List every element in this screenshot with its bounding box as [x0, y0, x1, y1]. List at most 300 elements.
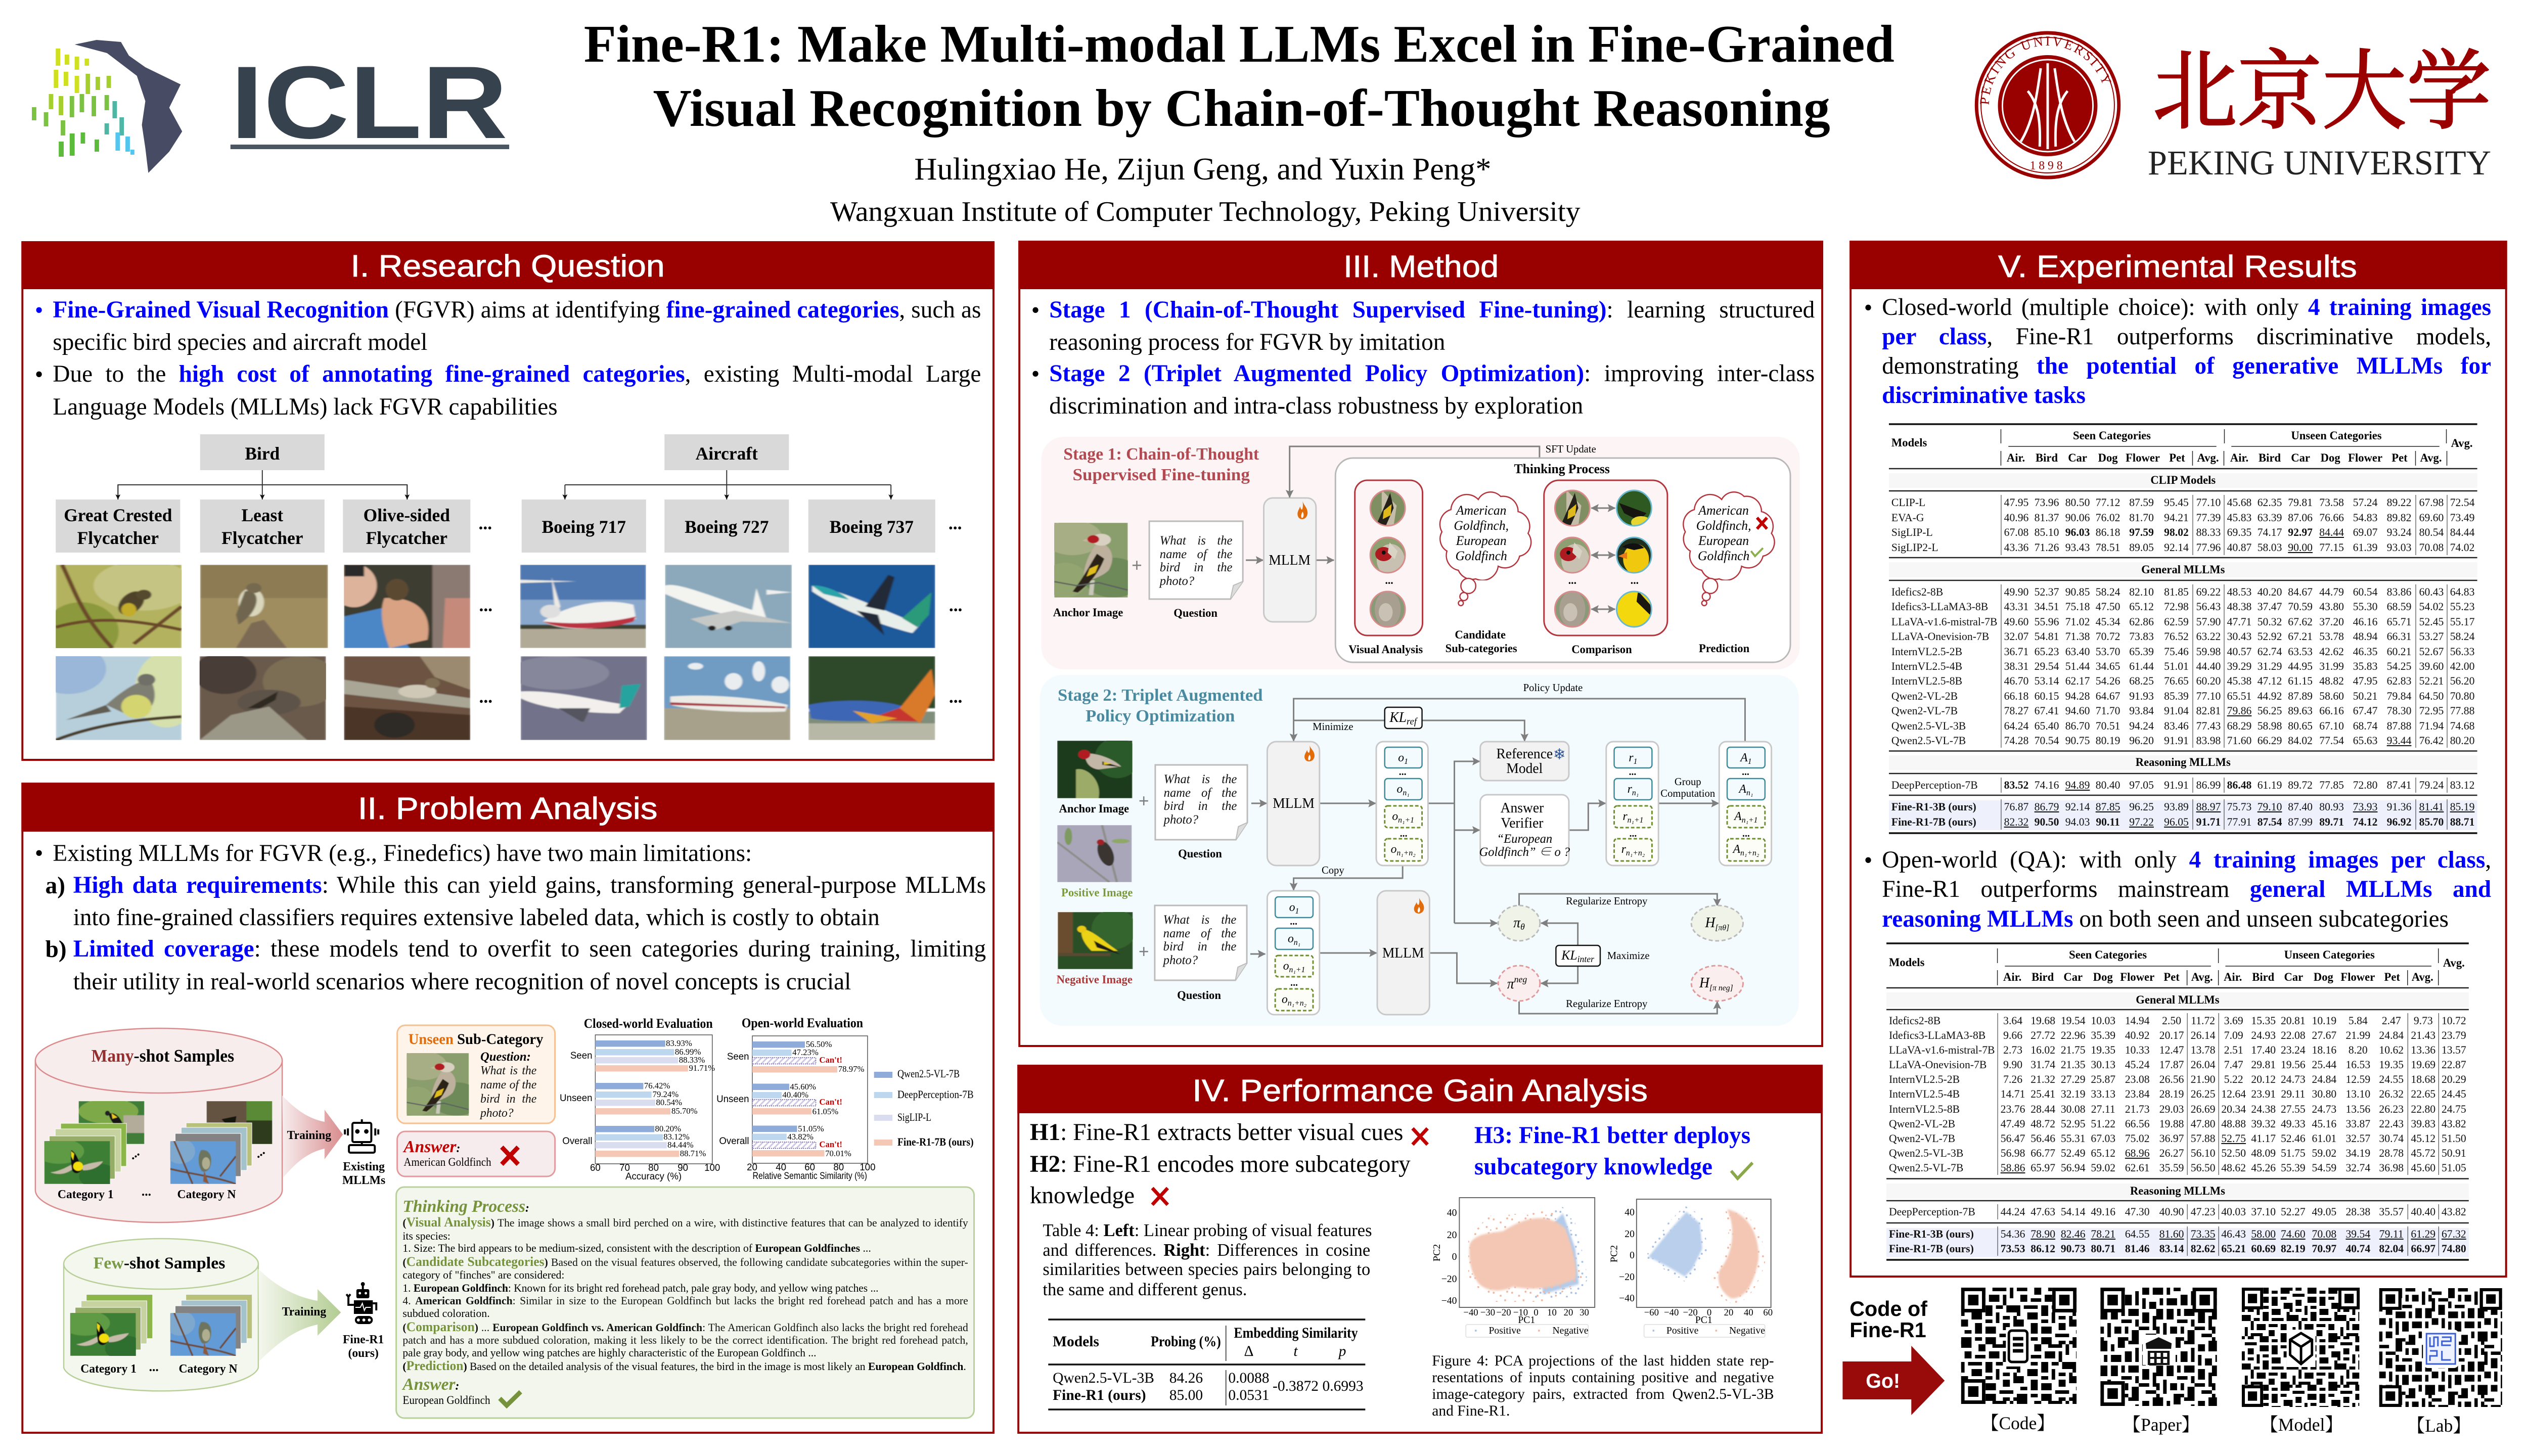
table: open-world QA: 67.32 — [2442, 1227, 2466, 1240]
table: closed-world accuracy: 70.59 — [2288, 600, 2313, 613]
table: open-world QA: Dog — [2093, 971, 2113, 983]
connectors: stage 2 data flow — [1250, 699, 1745, 1014]
table: open-world QA: 56.50 — [2191, 1161, 2216, 1174]
table: closed-world accuracy: 94.24 — [2129, 719, 2154, 732]
scatter chart: PCA Qwen2.5-VL-3B: −30 — [1480, 1307, 1495, 1318]
table: open-world QA: 30.74 — [2379, 1132, 2404, 1145]
text: positive image: Positive Image — [1061, 886, 1133, 899]
text: closed-world result: per class, Fine-R1 outperforms discriminative models, — [1882, 323, 2491, 350]
thought cloud: prediction: European — [1698, 533, 1749, 548]
table: open-world QA: Avg. — [2443, 957, 2465, 969]
table: open-world QA: 59.02 — [2312, 1147, 2336, 1159]
table: open-world QA: 37.10 — [2251, 1205, 2276, 1218]
text: limitations: b) — [46, 936, 67, 963]
table: closed-world accuracy: 43.36 — [2004, 541, 2028, 554]
table: closed-world accuracy: 73.93 — [2353, 800, 2377, 813]
text: category labels: ... — [251, 1143, 267, 1161]
scatter chart: PCA Qwen2.5-VL-3B: −20 — [1441, 1273, 1457, 1285]
table: closed-world accuracy: 65.63 — [2353, 734, 2377, 747]
stack: copied outputs o: n₁ — [1294, 938, 1300, 947]
node: policy pi neg: π — [1507, 976, 1514, 992]
node: policy pi: π — [1513, 915, 1520, 931]
table: closed-world accuracy: 68.29 — [2227, 719, 2251, 732]
table: open-world QA: 78.90 — [2030, 1227, 2055, 1240]
table: closed-world accuracy: 56.33 — [2450, 645, 2474, 658]
table: closed-world accuracy: 82.81 — [2196, 704, 2221, 717]
table: closed-world accuracy: 68.59 — [2387, 600, 2411, 613]
table: open-world QA: 32.57 — [2345, 1132, 2370, 1145]
table: open-world QA: 39.32 — [2251, 1117, 2276, 1130]
panel: III. Method — [1018, 241, 1823, 1046]
table: open-world QA: 19.35 — [2379, 1058, 2404, 1071]
diagram: many-shot database — [34, 1028, 282, 1222]
table: closed-world accuracy: 60.20 — [2196, 674, 2221, 687]
diagram: bird taxonomy labels: Great Crested — [64, 505, 172, 525]
table: closed-world accuracy: 77.10 — [2196, 690, 2221, 702]
table: probing and embedding similarity: 85.00 — [1169, 1387, 1203, 1403]
table: closed-world accuracy: 37.47 — [2258, 600, 2282, 613]
table: open-world QA: 21.35 — [2061, 1058, 2086, 1071]
table: closed-world accuracy: 37.20 — [2319, 615, 2344, 628]
table: closed-world accuracy: Qwen2.5-VL-3B — [1891, 719, 1966, 732]
table: open-world QA: 65.12 — [2091, 1147, 2115, 1159]
scatter chart: PCA Qwen2.5-VL-3B: 40 — [1447, 1207, 1457, 1218]
scatter chart: PCA Fine-R1: 20 — [1624, 1228, 1635, 1240]
text: connector labels: Group — [1675, 776, 1701, 788]
photo: great crested flycatcher 2 — [30, 644, 198, 740]
node: policy pi neg: neg — [1514, 974, 1527, 984]
bar chart: closed-world evaluation: Accuracy (%) — [625, 1171, 682, 1181]
table: open-world QA: 19.69 — [2411, 1058, 2435, 1071]
table: open-world QA: 73.35 — [2191, 1227, 2216, 1240]
table: closed-world accuracy: 45.34 — [2096, 615, 2120, 628]
text: step labels: Visual Analysis — [1348, 643, 1423, 656]
table: closed-world accuracy: 35.83 — [2353, 660, 2377, 672]
bar chart: open-world evaluation: 61.05% — [812, 1107, 838, 1116]
text: QR labels: 【Model】 — [2260, 1415, 2343, 1435]
table: open-world QA: 30.80 — [2312, 1087, 2336, 1100]
table: closed-world accuracy: 66.16 — [2319, 704, 2344, 717]
table: open-world QA: 32.74 — [2345, 1161, 2370, 1174]
text: category labels: ... — [142, 1184, 151, 1199]
table: closed-world accuracy: 62.17 — [2065, 674, 2090, 687]
box: KL ref: ref — [1407, 716, 1418, 727]
table: open-world QA: 35.39 — [2091, 1029, 2115, 1041]
table: closed-world accuracy: 32.07 — [2004, 630, 2028, 643]
table: open-world QA: 66.97 — [2411, 1242, 2435, 1255]
text: plus signs — [1139, 791, 1149, 962]
table: open-world QA: Bird — [2252, 971, 2275, 983]
diagram: bird taxonomy labels: ... — [479, 513, 492, 533]
table: closed-world accuracy: 80.54 — [2419, 526, 2444, 538]
table: open-world QA: 51.22 — [2091, 1117, 2115, 1130]
table: closed-world accuracy: 80.65 — [2288, 719, 2313, 732]
thought cloud: prediction: Goldfinch — [1698, 549, 1749, 563]
title: Fine-R1: Make Multi-modal LLMs Excel in Fine-Grained — [584, 14, 1894, 73]
table: open-world QA: 30.13 — [2091, 1058, 2115, 1071]
table: closed-world accuracy: 36.71 — [2004, 645, 2028, 658]
table: open-world QA: 45.72 — [2411, 1147, 2435, 1159]
box: KL inter: inter — [1577, 954, 1594, 964]
heading: stage 2: Policy Optimization — [1086, 707, 1235, 725]
table: closed-world accuracy: 88.71 — [2450, 815, 2474, 828]
table: closed-world accuracy: 60.54 — [2353, 585, 2377, 598]
table: open-world QA: 47.30 — [2125, 1205, 2150, 1218]
card: question negative: Question — [1177, 989, 1221, 1002]
table: closed-world accuracy: 71.02 — [2065, 615, 2090, 628]
text: research question bullets: specific bird species and aircraft model — [53, 329, 427, 355]
scatter chart: PCA Fine-R1: 40 — [1624, 1207, 1635, 1218]
arrow: few-shot training: Training — [282, 1305, 326, 1318]
callout: thinking process — [396, 1187, 974, 1418]
table: open-world QA: 27.29 — [2061, 1073, 2086, 1085]
table: open-world QA: 25.87 — [2091, 1073, 2115, 1085]
table: open-world QA: 14.94 — [2125, 1014, 2150, 1027]
photo: anchor image — [1043, 520, 1143, 598]
table: closed-world accuracy: 73.96 — [2035, 496, 2059, 509]
heading: section III: III. Method — [1343, 249, 1499, 284]
node: entropy H pi neg: [π neg] — [1709, 984, 1733, 992]
table: probing and embedding similarity: t — [1293, 1343, 1298, 1359]
table: open-world QA: 45.16 — [2312, 1117, 2336, 1130]
bar chart: open-world evaluation: Overall — [719, 1135, 749, 1146]
table: closed-world accuracy: Qwen2-VL-2B — [1891, 690, 1958, 702]
table: open-world QA: 54.36 — [2001, 1227, 2025, 1240]
table: open-world QA: 56.94 — [2061, 1161, 2086, 1174]
table: closed-world accuracy: Avg. — [2197, 451, 2219, 464]
table: open-world QA: 61.01 — [2312, 1132, 2336, 1145]
heading: section III — [1018, 241, 1823, 289]
stack: rewards r: n₁+n₂ — [1626, 849, 1645, 857]
text: connector labels: Computation — [1660, 787, 1716, 799]
table: open-world QA: 10.19 — [2312, 1014, 2336, 1027]
table: closed-world accuracy: 83.46 — [2164, 719, 2189, 732]
table: open-world QA: 20.29 — [2442, 1073, 2466, 1085]
table: closed-world accuracy: 71.70 — [2096, 704, 2120, 717]
table: closed-world accuracy: 66.31 — [2387, 630, 2411, 643]
table: open-world QA: 9.66 — [2003, 1029, 2022, 1041]
callout: thinking process: (Candidate Subcategories) Based on the visual features observed, the following candidate subcategories within the super- — [402, 1254, 968, 1269]
table: closed-world accuracy: 90.06 — [2065, 511, 2090, 524]
table: open-world QA: 49.05 — [2312, 1205, 2336, 1218]
table: closed-world accuracy: Seen Categories — [2073, 429, 2151, 442]
table: closed-world accuracy: 91.04 — [2164, 704, 2189, 717]
card: question: What is the name of the bird in the photo? — [1160, 534, 1232, 587]
table: closed-world accuracy: 93.24 — [2387, 526, 2411, 538]
table: open-world QA: Pet — [2384, 971, 2400, 983]
table: closed-world accuracy: 93.43 — [2065, 541, 2090, 554]
bar chart: open-world evaluation: 78.97% — [838, 1064, 864, 1074]
text: connector labels: Copy — [1322, 864, 1344, 876]
text: hypotheses H1 H2: H2: Fine-R1 encodes more subcategory — [1030, 1151, 1411, 1177]
callout: thinking process: Thinking Process: — [402, 1197, 529, 1216]
stack: copied outputs o: o — [1282, 993, 1288, 1006]
card: question anchor: Question — [1178, 847, 1222, 860]
table: closed-world accuracy: 67.47 — [2353, 704, 2377, 717]
table: open-world QA: 43.82 — [2442, 1205, 2466, 1218]
table: open-world QA: Models — [1889, 956, 1925, 969]
table: closed-world accuracy: Air. — [2007, 451, 2025, 464]
stack: rewards r: ... — [1630, 828, 1637, 839]
table: closed-world accuracy: 60.43 — [2419, 585, 2444, 598]
table: closed-world accuracy: 60.21 — [2387, 645, 2411, 658]
arrow: Go — [1842, 1346, 1945, 1415]
table: closed-world accuracy: 67.98 — [2419, 496, 2444, 509]
text: negative image: Negative Image — [1057, 973, 1133, 986]
text: QR labels: 【Lab】 — [2407, 1416, 2471, 1436]
table: closed-world accuracy: InternVL2.5-4B — [1891, 660, 1962, 672]
table: closed-world accuracy: Reasoning MLLMs — [2136, 756, 2231, 768]
stack: advantages A: n₁+1 — [1742, 816, 1758, 825]
table: open-world QA: 49.33 — [2281, 1117, 2306, 1130]
table: closed-world accuracy: 89.71 — [2319, 815, 2344, 828]
table: closed-world accuracy: Idefics2-8B — [1891, 585, 1943, 598]
photo: olive-sided flycatcher 1 — [331, 564, 470, 648]
bar chart: closed-world evaluation: 84.44% — [667, 1140, 694, 1150]
scatter chart: PCA Qwen2.5-VL-3B — [1431, 1198, 1595, 1337]
callout: thinking process: (Comparison) ... European Goldfinch vs. American Goldfinch: The American Goldfinch also lacks the bright red forehead — [402, 1320, 968, 1334]
table: open-world QA: 22.65 — [2411, 1087, 2435, 1100]
table: closed-world accuracy: 81.85 — [2164, 585, 2189, 598]
table: open-world QA: 61.29 — [2411, 1227, 2435, 1240]
thought cloud: prediction — [1683, 492, 1775, 606]
stack: outputs o: o — [1398, 751, 1404, 764]
stack: outputs o: o — [1397, 783, 1403, 796]
table: open-world QA: 28.19 — [2159, 1087, 2184, 1100]
table: open-world QA: 24.38 — [2251, 1103, 2276, 1115]
text: ellipses after image rows: ... — [949, 687, 962, 707]
diagram: aircraft taxonomy labels: Boeing 737 — [830, 517, 914, 537]
card: question — [1149, 521, 1243, 599]
table: open-world QA: Fine-R1-7B (ours) — [1889, 1242, 1974, 1255]
table: open-world QA: Qwen2-VL-7B — [1889, 1132, 1955, 1145]
scatter chart: PCA Qwen2.5-VL-3B: PC1 — [1518, 1314, 1535, 1326]
text: limitations: their utility in real-world scenarios where recognition of novel concepts is crucial — [73, 969, 851, 995]
bar chart: open-world evaluation: 80 — [833, 1162, 844, 1172]
table: open-world QA: 24.84 — [2379, 1029, 2404, 1041]
footer: code links — [1842, 1284, 2505, 1436]
table: open-world QA: 13.56 — [2345, 1103, 2370, 1115]
text: few category labels: Category N — [178, 1362, 238, 1376]
image stack: category 1 — [34, 1099, 144, 1189]
table: closed-world accuracy: 61.15 — [2288, 674, 2313, 687]
diagram: bird taxonomy labels: Flycatcher — [366, 528, 447, 548]
box: KL inter — [1556, 945, 1600, 966]
table: closed-world accuracy: 75.73 — [2227, 800, 2251, 813]
table: closed-world accuracy: LLaVA-v1.6-mistral-7B — [1891, 615, 1997, 628]
heading: few-shot samples: Few-shot Samples — [94, 1254, 225, 1272]
stack: rewards r: 1 — [1634, 757, 1638, 766]
text: closed-world result: Closed-world (multiple choice): with only 4 training images — [1882, 294, 2491, 321]
table: open-world QA: Flower — [2120, 971, 2154, 983]
table: probing and embedding similarity: 0.0088 — [1228, 1370, 1270, 1386]
table: closed-world accuracy: 54.83 — [2353, 511, 2377, 524]
table: probing and embedding similarity: 0.0531 — [1228, 1387, 1270, 1403]
table: closed-world accuracy: 66.18 — [2004, 690, 2028, 702]
bar chart: open-world evaluation: 45.60% — [790, 1082, 816, 1091]
table: open-world QA: 27.55 — [2281, 1103, 2306, 1115]
table: closed-world accuracy: Flower — [2348, 451, 2382, 464]
stack: rewards r: r — [1621, 843, 1626, 856]
bar chart: closed-world evaluation: 100 — [704, 1162, 720, 1173]
stack: copied outputs o: o — [1288, 932, 1294, 945]
stack: copied outputs o: ... — [1290, 977, 1298, 988]
table: open-world QA: InternVL2.5-2B — [1889, 1073, 1960, 1085]
logo wordmark: ICLR: ICLR — [231, 45, 508, 160]
table: probing and embedding similarity: Embedding Similarity — [1234, 1325, 1358, 1341]
table: open-world QA: 29.03 — [2159, 1103, 2184, 1115]
table: closed-world accuracy: 87.40 — [2288, 800, 2313, 813]
table: open-world QA: 23.08 — [2125, 1073, 2150, 1085]
table: closed-world accuracy: 93.84 — [2129, 704, 2154, 717]
text: few category labels — [80, 1359, 238, 1376]
authors: Hulingxiao He, Zijun Geng, and Yuxin Peng* — [914, 152, 1491, 187]
text: limitations: into fine-grained classifiers requires extensive labeled data, which is costly to obtain — [73, 904, 880, 931]
table: open-world QA: Qwen2-VL-2B — [1889, 1117, 1955, 1130]
photo: great crested flycatcher 1 — [56, 565, 182, 648]
bar chart: open-world evaluation: 60 — [804, 1162, 815, 1172]
table: closed-world accuracy: 89.72 — [2288, 779, 2313, 791]
table: closed-world accuracy: 80.20 — [2450, 734, 2474, 747]
box: reference model — [1480, 742, 1569, 781]
table: closed-world accuracy: 42.62 — [2319, 645, 2344, 658]
bar chart: closed-world evaluation: 79.24% — [653, 1089, 679, 1099]
table: open-world QA: 10.62 — [2379, 1043, 2404, 1056]
table: open-world QA — [1886, 943, 2469, 1260]
bar chart: open-world evaluation: 47.23% — [792, 1048, 819, 1057]
table: closed-world accuracy: Idefics3-LLaMA3-8B — [1891, 600, 1988, 613]
table: closed-world accuracy: Dog — [2098, 451, 2118, 464]
table: closed-world accuracy: 90.85 — [2065, 585, 2090, 598]
table: open-world QA: Pet — [2163, 971, 2180, 983]
table: open-world QA: 47.49 — [2001, 1117, 2025, 1130]
box: reference model: Reference — [1497, 746, 1553, 762]
table: closed-world accuracy: 92.14 — [2164, 541, 2189, 554]
text: research question bullets: Fine-Grained Visual Recognition (FGVR) aims at identifying fine-grained categories, such as — [53, 296, 981, 323]
table: closed-world accuracy: 87.89 — [2288, 690, 2313, 702]
table: closed-world accuracy: 70.51 — [2096, 719, 2120, 732]
table: open-world QA: 26.04 — [2191, 1058, 2216, 1071]
table: closed-world accuracy: Avg. — [2420, 451, 2442, 464]
table: open-world QA: 21.43 — [2411, 1029, 2435, 1041]
icon: cross H2 — [1152, 1188, 1168, 1205]
photo: olive-sided flycatcher 2 — [344, 656, 470, 740]
box: MLLM bottom — [1377, 891, 1429, 1015]
thought cloud: prediction: American — [1697, 503, 1749, 518]
table: open-world QA: InternVL2.5-4B — [1889, 1087, 1960, 1100]
table: open-world QA: 13.78 — [2191, 1043, 2216, 1056]
panel: I. Research Question — [21, 241, 995, 760]
table: closed-world accuracy: 78.51 — [2096, 541, 2120, 554]
table: closed-world accuracy: 48.53 — [2227, 585, 2251, 598]
table: open-world QA: 26.69 — [2191, 1103, 2216, 1115]
table: open-world QA: 79.11 — [2379, 1227, 2404, 1240]
table: open-world QA: 29.81 — [2251, 1058, 2276, 1071]
table: closed-world accuracy: 80.40 — [2096, 779, 2120, 791]
table: closed-world accuracy: 76.66 — [2319, 511, 2344, 524]
table: open-world QA: 51.50 — [2442, 1132, 2466, 1145]
table: closed-world accuracy: 72.54 — [2450, 496, 2474, 509]
table: closed-world accuracy: 45.83 — [2227, 511, 2251, 524]
table: closed-world accuracy: 64.67 — [2096, 690, 2120, 702]
callout: thinking process: Answer: — [401, 1375, 459, 1394]
text: code of Fine-R1: Code of — [1849, 1297, 1927, 1321]
bar chart: closed-world evaluation: Overall — [562, 1135, 592, 1146]
heading: section I — [21, 241, 995, 289]
heading: stage 2: Stage 2: Triplet Augmented — [1058, 686, 1263, 705]
diagram: few-shot database — [60, 1239, 258, 1391]
table: closed-world accuracy: 89.05 — [2129, 541, 2154, 554]
table: open-world QA: 19.35 — [2091, 1043, 2115, 1056]
table: closed-world accuracy: CLIP Models — [2150, 474, 2216, 486]
text: connector labels: Regularize Entropy — [1566, 895, 1648, 907]
table: open-world QA: 55.39 — [2281, 1161, 2306, 1174]
stack: outputs o: 1 — [1404, 757, 1408, 766]
table: open-world QA: 21.90 — [2191, 1073, 2216, 1085]
table: closed-world accuracy: 91.91 — [2164, 734, 2189, 747]
table: closed-world accuracy: 79.81 — [2288, 496, 2313, 509]
stack: rewards r: n₁ — [1632, 789, 1639, 797]
table: closed-world accuracy: Avg. — [2451, 437, 2473, 449]
table: probing and embedding similarity: Qwen2.5-VL-3B — [1053, 1370, 1154, 1386]
photo: boeing 737 b — [808, 656, 935, 740]
table: closed-world accuracy: 58.24 — [2450, 630, 2474, 643]
table: closed-world accuracy: 44.95 — [2288, 660, 2313, 672]
table: closed-world accuracy: 52.92 — [2258, 630, 2282, 643]
text: limitations: • — [35, 840, 43, 867]
text: hypothesis H3: subcategory knowledge — [1474, 1154, 1712, 1180]
table: closed-world accuracy: 98.02 — [2164, 526, 2189, 538]
table: closed-world accuracy: 79.84 — [2387, 690, 2411, 702]
table: open-world QA: 12.64 — [2221, 1087, 2246, 1100]
table: open-world QA: 24.73 — [2312, 1103, 2336, 1115]
callout: unseen sub-category question: Question: — [480, 1050, 531, 1064]
diagram: bird taxonomy labels: Bird — [245, 443, 280, 464]
table: closed-world accuracy: 81.41 — [2419, 800, 2444, 813]
callout: unseen sub-category question — [397, 1025, 555, 1123]
scatter chart: PCA Fine-R1: 0 — [1630, 1250, 1635, 1261]
table: closed-world accuracy: 91.93 — [2129, 690, 2154, 702]
table: closed-world accuracy: 50.21 — [2353, 690, 2377, 702]
bar chart: open-world evaluation: 20 — [747, 1162, 757, 1172]
table: closed-world accuracy: 81.70 — [2129, 511, 2154, 524]
arrow: SFT update: SFT Update — [1546, 443, 1596, 455]
box: MLLM — [1264, 498, 1316, 622]
table: closed-world accuracy: 85.10 — [2035, 526, 2059, 538]
table: open-world QA: 52.95 — [2061, 1117, 2086, 1130]
bar chart: open-world evaluation: Relative Semantic Similarity (%) — [752, 1170, 867, 1181]
table: open-world QA: 54.14 — [2061, 1205, 2086, 1218]
table: closed-world accuracy: 76.52 — [2164, 630, 2189, 643]
text: table 4 caption: the same and different genus. — [1043, 1280, 1247, 1299]
table: closed-world accuracy: General MLLMs — [2141, 563, 2225, 576]
table: closed-world accuracy: 80.93 — [2319, 800, 2344, 813]
table: open-world QA: Qwen2.5-VL-3B — [1889, 1147, 1963, 1159]
table: open-world QA: 70.08 — [2312, 1227, 2336, 1240]
table: closed-world accuracy: 84.02 — [2288, 734, 2313, 747]
scatter chart: PCA Fine-R1: Positive — [1666, 1325, 1699, 1336]
table: closed-world accuracy: 71.94 — [2419, 719, 2444, 732]
table: open-world QA: Bird — [2032, 971, 2054, 983]
table: closed-world accuracy: 57.24 — [2353, 496, 2377, 509]
text: anchor image: Anchor Image — [1059, 802, 1129, 815]
table: open-world QA: 44.24 — [2001, 1205, 2025, 1218]
table: closed-world accuracy: 97.22 — [2129, 815, 2154, 828]
table: closed-world accuracy: 40.87 — [2227, 541, 2251, 554]
group: comparison crops: ... — [1631, 574, 1639, 586]
table: closed-world accuracy — [1889, 424, 2477, 833]
bar chart: closed-world evaluation: 88.71% — [680, 1149, 706, 1158]
